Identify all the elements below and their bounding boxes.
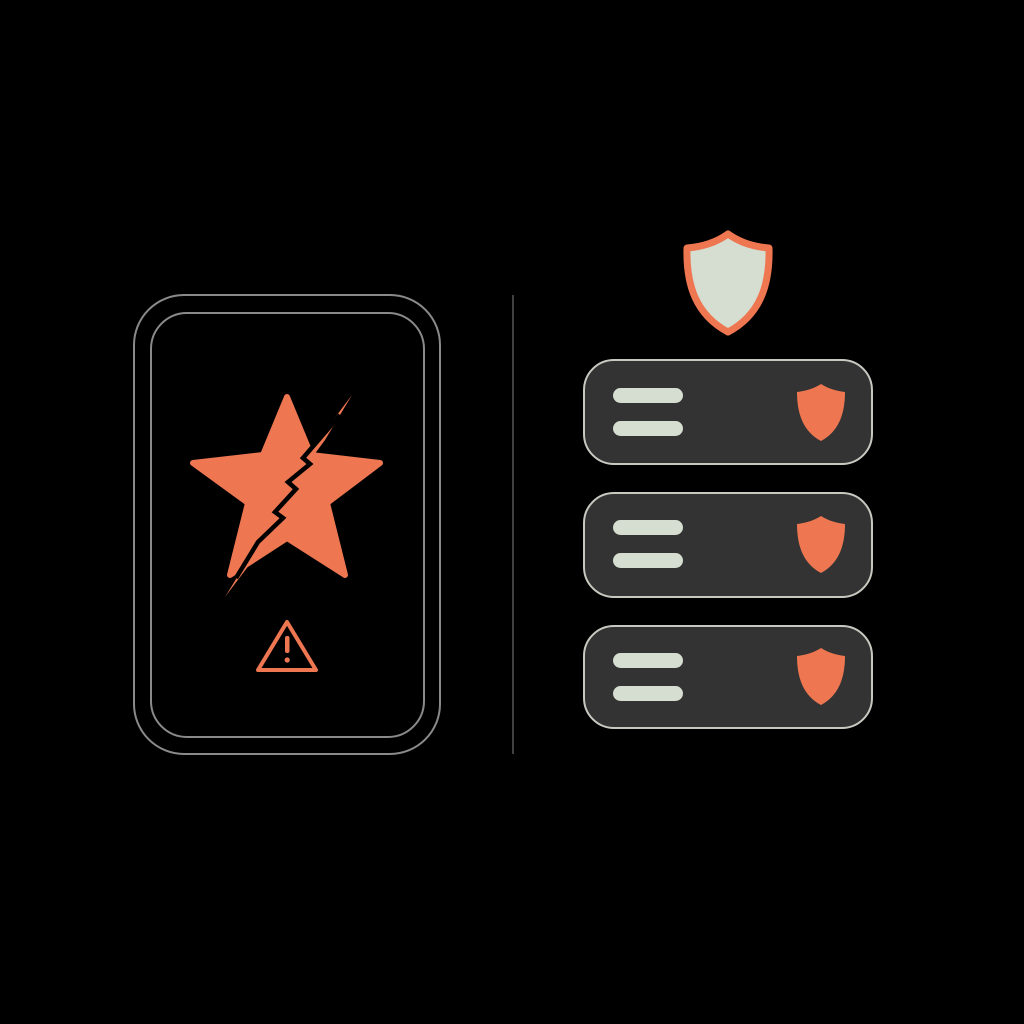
icon: main shield [687,234,769,332]
panel: server 2 [584,493,872,597]
divider [512,295,514,754]
panel: server 3 [584,626,872,728]
panel: device frame [134,295,440,754]
icon: warning triangle [258,622,316,670]
icon: broken star [193,395,380,597]
panel: server 1 [584,360,872,464]
